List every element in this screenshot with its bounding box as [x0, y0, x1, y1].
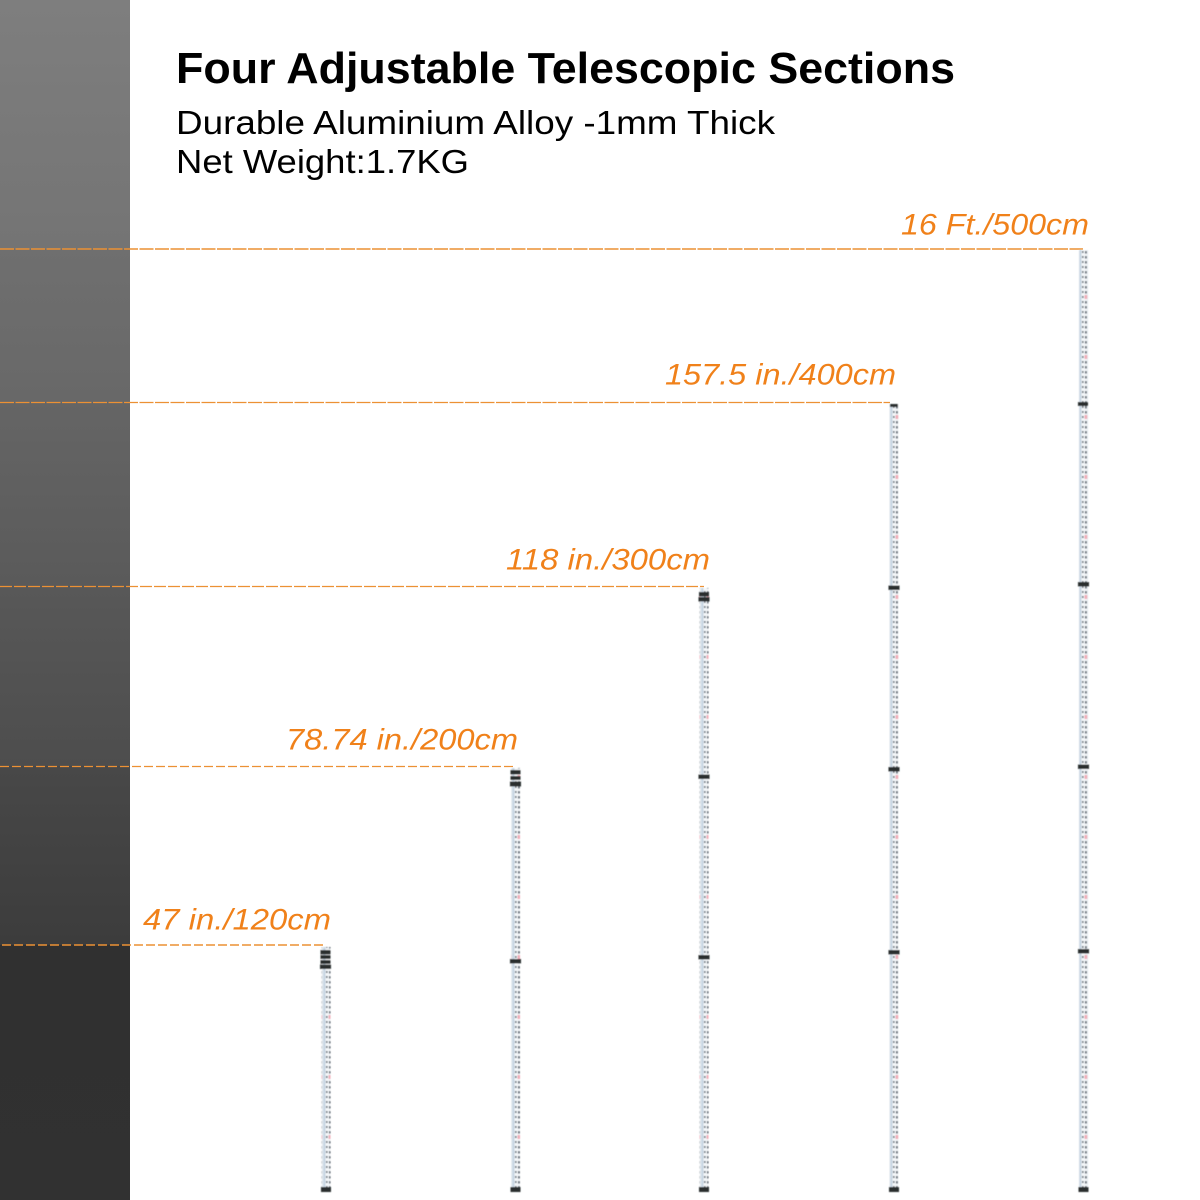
subtitle: material: Durable Aluminium Alloy -1mm Thick	[176, 104, 776, 141]
sidebar: stepped grey gradient	[0, 0, 130, 1200]
height guide: 16 Ft: 16 Ft./500cm	[901, 208, 1089, 242]
height guide: 47 in: 47 in./120cm	[143, 904, 331, 936]
title: Four Adjustable Telescopic Sections	[176, 45, 955, 93]
subtitle: net weight: Net Weight:1.7KG	[176, 143, 469, 180]
pole: 200cm	[510, 768, 521, 1192]
pole: 400cm	[888, 404, 900, 1192]
height guide: 157.5 in: 157.5 in./400cm	[665, 358, 896, 392]
height guide: 118 in: 118 in./300cm	[506, 544, 710, 576]
pole: 500cm, fully extended	[1078, 250, 1089, 1192]
pole: 120cm, fully collapsed	[320, 947, 331, 1192]
height guide: 78.74 in: 78.74 in./200cm	[286, 724, 518, 756]
pole: 300cm	[698, 588, 710, 1192]
